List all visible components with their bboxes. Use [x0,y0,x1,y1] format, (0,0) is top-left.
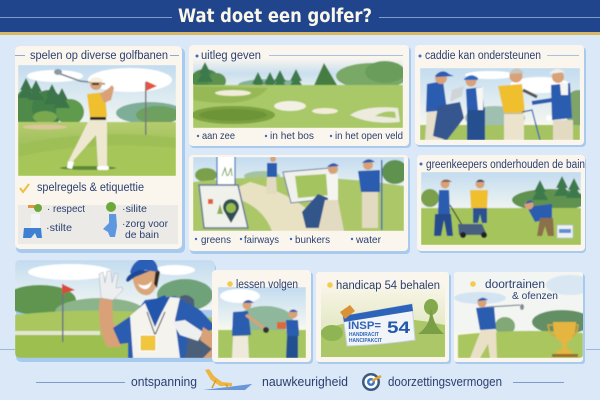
panel 9 heading: doortrainen [485,279,545,291]
hero panel: waving golfer [15,260,216,362]
handicap card [340,304,415,346]
course feature labels [195,234,381,246]
greenkeepers scene [421,172,588,245]
footer qualities [36,369,564,391]
bag on shoulder [178,294,212,358]
footer qualities: ontspanning [131,375,197,389]
course landscape with bunkers [191,58,408,128]
panel 2 location labels: in het bos [270,130,314,142]
etiquette list: ·silite [122,203,147,215]
etiquette list: de bain [125,229,159,241]
panel: uitleg geven [189,45,411,148]
caddies and players scene [420,68,592,140]
course feature labels: bunkers [295,234,330,246]
panel: doortrainen en oefenen [454,272,594,364]
panel 8 heading: handicap 54 behalen [336,280,440,292]
panel 2 heading: uitleg geven [201,50,261,62]
icon: lounge chair [203,369,252,390]
panel 9 heading [470,279,558,302]
etiquette list: ·zorg voor [122,218,168,230]
panel 1 heading: spelen op diverse golfbanen [30,50,168,62]
panel 9 heading: & ofenzen [512,290,558,302]
etiquette list [18,202,178,244]
handicap card: HANDIRACIT [349,332,379,338]
etiquette list: ·stilte [46,222,72,234]
panel: spelen op diverse golfbanen [14,46,185,253]
waving arm and glove [99,271,124,347]
handicap card: HANCIPAKCIT [349,338,382,344]
footer qualities: doorzettingsvermogen [388,375,502,389]
course feature labels: fairways [244,234,279,246]
handicap card scene [321,283,445,357]
panel: handicap 54 behalen [316,272,451,364]
panel 3 heading: caddie kan ondersteunen [425,50,541,62]
panel 2 location labels: in het open veld [335,130,403,142]
panel 7 heading: lessen volgen [236,279,298,291]
panel: caddie kan ondersteunen [415,45,592,147]
course feature labels: water [355,234,381,246]
title: Wat doet een golfer? [178,6,372,27]
golf course scene with swinging golfer [14,65,184,176]
header banner [0,0,600,35]
handicap card: 54 [387,318,411,337]
decorative side lines [0,349,600,350]
trophy [548,322,578,357]
flag on hero [62,284,75,342]
panel: lessen volgen [212,270,313,364]
panel: greenkeepers onderhouden de baan [417,155,588,253]
icon: target with arrow [362,373,381,391]
golfer body [113,295,224,358]
handicap card: INSP= [348,320,381,332]
spelregels heading with check: spelregels & etiquettie [37,182,144,194]
panel 2 location labels [197,130,403,142]
course feature labels: greens [201,234,231,246]
doortrainen scene [454,272,594,358]
course planning scene [193,153,408,231]
footer qualities: nauwkeurigheid [262,375,348,389]
panel: baanonderdelen [189,153,410,254]
lesson scene [218,287,306,358]
panel 2 heading [196,50,403,62]
panel 2 location labels: aan zee [202,130,235,142]
etiquette list: · respect [47,203,85,215]
golfer head with blue cap [126,258,160,295]
